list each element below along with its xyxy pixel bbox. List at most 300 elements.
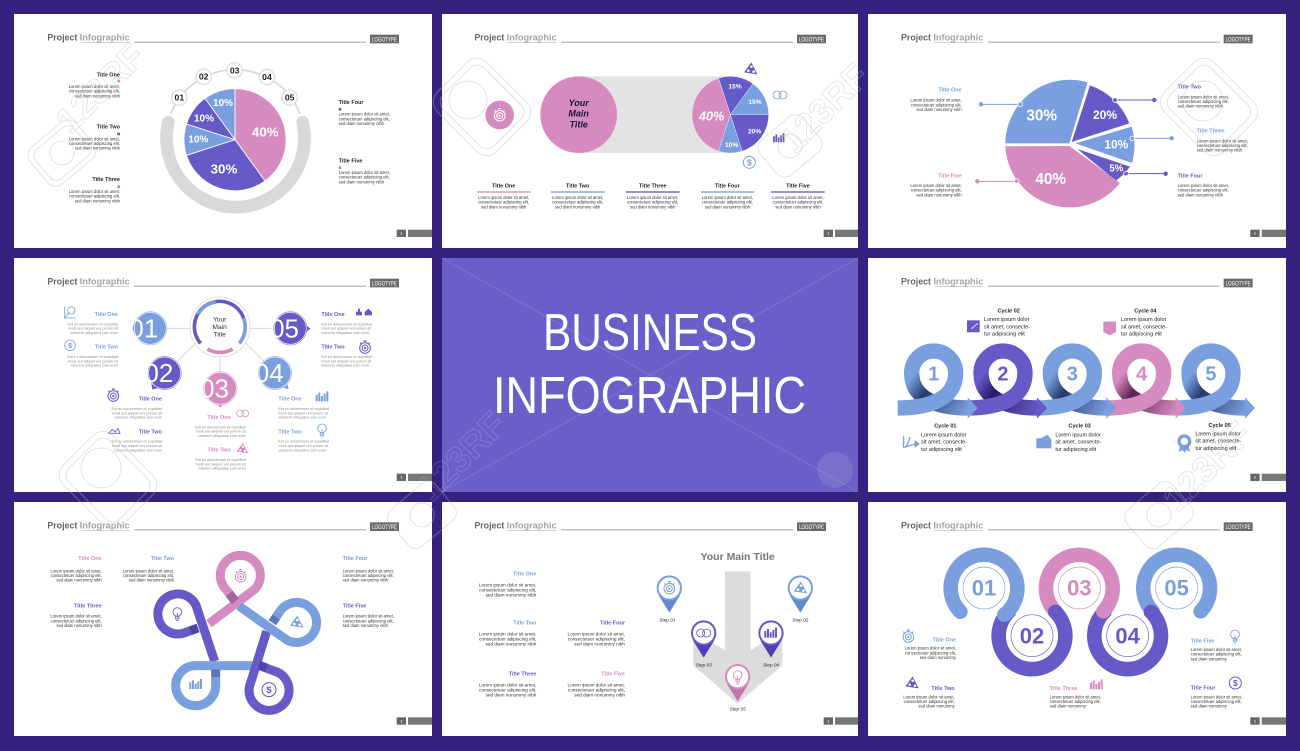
text block: 04 One: modi aut aliqnet uni porum sit [278, 411, 329, 415]
text block: 04 Two [278, 429, 330, 452]
column: Title One: consectetuer adipiscing elit, [478, 200, 529, 205]
column: Title Five: Lorem ipsum dolor sit amet, [772, 195, 824, 200]
icon: dollar purple [262, 683, 276, 697]
text: Title Five: Lorem ipsum dolor sit amet, [1191, 647, 1242, 652]
header: Infographic [933, 277, 983, 287]
text: Title Two [903, 686, 956, 709]
text: Title Three: Lorem ipsum dolor sit amet, [1050, 694, 1101, 699]
column: Title Two [551, 183, 605, 209]
pie labels: 15% [728, 84, 742, 91]
column: Title Two: Lorem ipsum dolor sit amet, [552, 195, 603, 200]
text: Title Two: sed diam nonummy nibh [75, 146, 121, 151]
text: Title Four: Lorem ipsum dolor sit amet, [339, 112, 390, 117]
knot: purple lower-right loop [249, 631, 289, 710]
main title: Your Main Title [701, 552, 775, 563]
title [493, 304, 806, 425]
number badges: 05 [285, 93, 295, 103]
header [474, 520, 858, 725]
text: Title One: Lorem ipsum dolor sit amet, [905, 646, 956, 651]
icon: dollar: $ [747, 157, 752, 167]
text: Title Two: sed diam nonummy [918, 704, 956, 709]
column: Title One: Lorem ipsum dolor sit amet, [478, 195, 529, 200]
icon: bulb blue [318, 424, 326, 437]
text block: 04 One: Est ex doloremum et cupiditat [278, 407, 330, 411]
text block: 05 Two: modi aut aliqnet uni porum sit [321, 359, 372, 363]
header: Project [474, 33, 504, 43]
icon: stopwatch pink [235, 569, 246, 582]
header: LOGOTYPE [1226, 36, 1251, 43]
ring 04: 04 [1115, 623, 1141, 648]
spiral 2 [967, 351, 1047, 419]
text block: 03 Two: Title Two [207, 448, 231, 454]
icon: magnifier [65, 306, 76, 318]
text: Title Three: Lorem ipsum dolor sit amet, [50, 614, 102, 619]
text block: 02 One: modi aut aliqnet uni porum sit [112, 411, 163, 415]
text block: 02 One: Est ex doloremum et cupiditat [112, 407, 163, 411]
text: Cycle 05: Cycle 05 [1209, 423, 1231, 429]
text: Title Three: consectetuer adipiscing elit, [51, 618, 102, 623]
text: Cycle 04: sit amet, consecte- [1121, 324, 1167, 330]
column: Title Three: Lorem ipsum dolor sit amet, [627, 195, 678, 200]
text: Title Five: Title Five [601, 672, 625, 678]
text block: 03 One: volorem vitiquatus cum eum [198, 434, 246, 438]
text: Title Four: Lorem ipsum dolor sit amet, [343, 568, 394, 573]
gray ring [166, 122, 304, 207]
text block: 03 One [195, 415, 247, 438]
node 02: 02 [144, 358, 173, 388]
text: Title Five: Title Five [938, 173, 962, 179]
text: Title One: consectetuer adipiscing elit, [905, 650, 956, 655]
text: Title Five: consectetuer adipiscing elit, [339, 175, 390, 180]
header: LOGOTYPE [1226, 524, 1251, 531]
pie labels: 40% [698, 110, 724, 124]
text block: 03 Two: Est ex doloremum et cupiditat [195, 458, 247, 462]
text: Title Four: sed diam nonummy nibh [574, 641, 625, 646]
spiral 5 [1175, 351, 1255, 419]
icon: cluster blue [290, 616, 303, 628]
header [47, 277, 432, 481]
text: Cycle 01: Lorem ipsum dolor [921, 432, 967, 438]
knot: blue right loop [239, 602, 317, 642]
pie labels: 10% [194, 113, 214, 124]
text: Title Five: consectetuer adipiscing elit, [343, 618, 394, 623]
text: Title Four: consectetuer adipiscing elit, [339, 116, 390, 121]
text: Title Two: consectetuer adipiscing elit, [479, 636, 536, 641]
text: Cycle 03: sit amet, consecte- [1055, 440, 1102, 446]
header: Infographic [507, 520, 557, 530]
text: Title Three: sed diam nonummy nibh [56, 623, 102, 628]
text block: 04 One: volorem vitiquatus cum eum [278, 416, 326, 420]
text: Title Three: sed diam nonummy nibh [486, 692, 537, 697]
text: Title One [50, 556, 102, 583]
text block: 02 Two: Title Two [139, 429, 163, 435]
text: Title One: sed diam nonummy [920, 655, 957, 660]
step labels: Step 03 [696, 663, 712, 668]
number badges: 01 [175, 93, 184, 103]
text: Title One [479, 572, 537, 597]
text block: 03 One: Title One [207, 415, 231, 421]
text: Title Four: Title Four [343, 556, 368, 562]
text: Title Two: Title Two [513, 621, 537, 627]
header: LOGOTYPE [372, 280, 397, 287]
text block: 04 Two: Est ex doloremum et cupiditat [278, 440, 330, 444]
column: Title Five: consectetuer adipiscing elit, [772, 200, 824, 205]
text block: 01 One [68, 312, 119, 335]
ring 01 [958, 562, 1010, 614]
title: INFOGRAPHIC [493, 367, 806, 425]
text: Title Three: consectetuer adipiscing elit, [1050, 699, 1101, 704]
pie labels: 10% [213, 98, 233, 109]
text: Cycle 02: tur adipiscing elit [984, 332, 1025, 338]
text: Title Two: Lorem ipsum dolor sit amet, [1178, 94, 1229, 99]
spiral 3 [1036, 351, 1116, 419]
gray arrow [693, 571, 782, 704]
header [47, 520, 432, 725]
pin 01 [657, 575, 682, 613]
text: Title One: Title One [938, 88, 962, 94]
pie labels [188, 98, 279, 176]
column: Title Two: Title Two [566, 183, 590, 189]
column: Title Two: sed diam nonummy nibh [555, 204, 601, 209]
text: Title Two: Lorem ipsum dolor sit amet, [479, 631, 536, 636]
text block: 02 Two: Est ex doloremum et cupiditat [112, 440, 163, 444]
text: Title Three: Title Three [92, 177, 120, 183]
text: Cycle 02: Lorem ipsum dolor [984, 317, 1030, 323]
pie labels: 15% [748, 99, 762, 106]
pie labels [698, 84, 762, 149]
text: Title Five [343, 604, 394, 628]
header [901, 520, 1286, 725]
header: Infographic [933, 520, 983, 530]
text: Cycle 01: sit amet, consecte- [921, 440, 967, 446]
icon: figures [356, 309, 372, 315]
text block: 02 Two [112, 429, 163, 452]
column: Title Three: Title Three [639, 183, 666, 189]
icon: dollar blue: $ [68, 341, 72, 350]
watermark overlay [24, 35, 1263, 553]
icon: bulb purple [173, 608, 182, 621]
column: Title Five: Title Five [786, 183, 810, 189]
text block: 05 Two: Title Two [321, 345, 345, 351]
icon: stopwatch badge [485, 101, 514, 129]
text: Title Three: sed diam nonummy [1050, 704, 1087, 709]
icon: dollar [743, 156, 755, 168]
text: Title One: sed diam nonummy nibh [486, 592, 537, 597]
text: Title One: Title One [97, 72, 120, 78]
text: Title Five: sed diam nonummy nibh [574, 692, 625, 697]
text: Title Three: Lorem ipsum dolor sit amet, [1197, 138, 1248, 143]
text block: 01 Two: volorem vitiquatus cum eum [70, 364, 118, 368]
text: Title Five: consectetuer adipiscing elit, [1191, 652, 1242, 657]
text: Title Three [69, 177, 121, 203]
column: Title Three [626, 183, 680, 209]
column: Title Three: sed diam nonummy nibh [630, 204, 676, 209]
header: 1 [400, 232, 402, 236]
pie labels: 10% [1104, 138, 1129, 152]
spiral 2: 2 [997, 363, 1009, 385]
pie labels: 5% [1109, 164, 1124, 175]
text: Cycle 03 [1055, 424, 1102, 453]
pie chart [184, 89, 286, 191]
text: Title Two: consectetuer adipiscing elit, [904, 699, 955, 704]
pin 04 [758, 620, 784, 658]
panel: center title [442, 258, 858, 492]
text block: 04 One [278, 397, 330, 420]
main title circle: Main [568, 109, 589, 119]
icon: chart blue [316, 391, 328, 401]
text block: 05 One: Est ex doloremum et cupiditat [321, 322, 373, 326]
ring 02: 02 [1020, 623, 1044, 648]
text block: 03 Two: volorem vitiquatus cum eum [198, 467, 246, 471]
connector: Title Five [975, 179, 1019, 183]
header: 1 [400, 719, 402, 723]
node 03: 03 [200, 373, 229, 403]
pie labels: 40% [252, 125, 279, 140]
text: Title One: Title One [933, 637, 956, 643]
text: Cycle 04: tur adipiscing elit [1121, 332, 1162, 338]
text: Title Two: Title Two [1178, 84, 1202, 90]
text block: 05 One [321, 312, 373, 335]
text block: 05 Two [321, 345, 373, 368]
icon: brain pink [237, 410, 249, 417]
header [901, 33, 1286, 237]
text: Title Four [339, 100, 390, 126]
knot: purple upper-left loop [158, 594, 215, 661]
number badges: 02 [199, 72, 209, 82]
icon: chart blue [189, 679, 202, 689]
watermark overlay: 123RF [1154, 413, 1260, 519]
ring 03 [1053, 562, 1105, 614]
title: BUSINESS [543, 304, 757, 362]
header [901, 277, 1286, 481]
text: Title Two: sed diam nonummy nibh [486, 641, 537, 646]
text: Title Two [1178, 84, 1229, 109]
column: Title Five [771, 183, 825, 209]
text: Title One [905, 637, 957, 660]
header: Infographic [80, 277, 130, 287]
icon: shield [1103, 322, 1116, 335]
pie chart [692, 76, 769, 153]
panel: down arrow with pins [442, 502, 858, 736]
text block: 03 Two: modi aut aliqnet uni porum sit [196, 462, 247, 466]
text block: 04 Two: volorem vitiquatus cum eum [278, 448, 326, 452]
header: 1 [1254, 719, 1256, 723]
connectors [166, 328, 274, 373]
node 01 [129, 312, 167, 345]
text block: 05 Two: volorem vitiquatus cum eum [321, 364, 369, 368]
node 05 [270, 312, 310, 345]
number badges: 04 [262, 72, 272, 82]
step labels: Step 01 [659, 617, 676, 622]
text block: 02 Two: volorem vitiquatus cum eum [114, 448, 162, 452]
header: Project [474, 520, 504, 530]
icon: stopwatch purple lower [108, 388, 119, 401]
text block: 04 One: Title One [278, 397, 302, 403]
pin 05 [725, 664, 750, 701]
icon: cluster [744, 62, 757, 74]
text: Title Five: sed diam nonummy nibh [343, 623, 389, 628]
connector: Title Two [1113, 98, 1156, 102]
hub title [212, 317, 227, 338]
text: Cycle 04: Cycle 04 [1134, 308, 1157, 314]
header [474, 33, 858, 237]
step labels: Step 04 [763, 663, 779, 668]
main title circle: Your [569, 98, 589, 108]
text: Title Five: Lorem ipsum dolor sit amet, [910, 183, 962, 188]
icon: brain [773, 91, 787, 99]
header: Project [901, 277, 931, 287]
icon: dollar blue [65, 340, 75, 351]
text block: 02 One: volorem vitiquatus cum eum [114, 416, 162, 420]
ring 01: 01 [972, 576, 996, 601]
text: Title Three [1197, 128, 1248, 153]
header: LOGOTYPE [372, 36, 397, 43]
text block: 05 One: volorem vitiquatus cum eum [321, 331, 369, 335]
node 03 [200, 372, 237, 408]
text block: 02 One [112, 397, 163, 420]
text: Title Three: sed diam nonummy nibh [1197, 148, 1243, 153]
text block: 05 One: Title One [321, 312, 345, 318]
icon: stopwatch purple [360, 340, 370, 353]
text: Title Four: Title Four [600, 621, 626, 627]
connector: Title One [979, 102, 1023, 107]
text: Cycle 04 [1121, 308, 1167, 338]
text: Title Four: Lorem ipsum dolor sit amet, [1178, 183, 1229, 188]
main title circle [540, 76, 617, 153]
text: Cycle 02: Cycle 02 [998, 308, 1020, 314]
panel: radial hub diagram [14, 258, 432, 492]
icon: arrows [903, 436, 919, 447]
icon: cluster [905, 676, 919, 688]
header: Project [901, 33, 931, 43]
step labels [659, 617, 809, 711]
text: Title Four: Title Four [1191, 686, 1216, 692]
text: Title Two: Title Two [151, 556, 175, 562]
text: Cycle 03: Cycle 03 [1069, 424, 1091, 430]
pie labels: 10% [188, 134, 208, 145]
text block: 04 Two: modi aut aliqnet uni porum sit [278, 444, 329, 448]
hub title: Main [212, 324, 227, 331]
icon: bulb [1231, 630, 1239, 643]
text: Title One: sed diam nonummy nibh [56, 578, 102, 583]
text: Title Four: Lorem ipsum dolor sit amet, [568, 631, 625, 636]
column: Title Four: consectetuer adipiscing elit, [702, 200, 753, 205]
text: Title One: Title One [513, 572, 536, 578]
text: Cycle 03: tur adipiscing elit [1055, 447, 1097, 453]
header: Project [47, 277, 77, 287]
arcs [951, 555, 1210, 669]
text block: 02 One: Title One [139, 397, 162, 403]
text: Cycle 02 [984, 308, 1030, 338]
text block: 05 One: modi aut aliqnet uni porum sit [321, 327, 372, 331]
panel: main title to pie [442, 14, 858, 248]
text: Title Three [50, 604, 102, 628]
ring 04 [1102, 610, 1154, 662]
header: 1 [1254, 476, 1256, 480]
icon: wallet [1036, 435, 1051, 448]
pie labels: 20% [1093, 108, 1117, 122]
text block: 03 Two [195, 448, 247, 471]
spiral 4 [1106, 351, 1186, 419]
text: Title One: consectetuer adipiscing elit, [69, 89, 120, 94]
text: Title Five: sed diam nonummy [1191, 656, 1228, 661]
step labels: Step 02 [792, 617, 809, 622]
text block: 01 Two: Est ex doloremum et cupiditat [68, 355, 119, 359]
column: Title Three: consectetuer adipiscing elit, [627, 200, 678, 205]
text: Title Four: Title Four [1178, 173, 1203, 179]
header: Infographic [933, 33, 983, 43]
icon: cluster pink [237, 443, 248, 453]
text: Title Three: Title Three [509, 672, 536, 678]
header: Project [901, 520, 931, 530]
pin 02 [788, 575, 813, 613]
text: Title Three: consectetuer adipiscing elit, [69, 194, 120, 199]
text: Title Five: Title Five [339, 158, 362, 164]
text: Title One [910, 88, 962, 112]
text: Title Five: Lorem ipsum dolor sit amet, [339, 170, 390, 175]
icon: dollar [1229, 677, 1241, 689]
column: Title Five: sed diam nonummy nibh [775, 204, 821, 209]
text: Title Three [479, 672, 537, 697]
text: Title Four [568, 621, 626, 646]
header: Infographic [80, 520, 130, 530]
pie labels: 30% [1026, 108, 1057, 125]
text: Cycle 05: tur adipiscing elit [1195, 446, 1237, 452]
watermark overlay: 123RF [771, 55, 877, 161]
ring 05: 05 [1164, 576, 1189, 601]
icon: pencil square [967, 320, 980, 332]
pie labels: 10% [725, 142, 738, 149]
column: Title One [477, 183, 531, 209]
text: Title Five: Lorem ipsum dolor sit amet, [343, 614, 394, 619]
pie labels: 40% [1035, 171, 1066, 188]
text: Title Four: sed diam nonummy nibh [1178, 192, 1224, 197]
header [47, 33, 432, 237]
text: Title Four: sed diam nonummy nibh [339, 121, 385, 126]
text: Title Five: sed diam nonummy nibh [339, 179, 385, 184]
text: Title Three: sed diam nonummy nibh [75, 198, 121, 203]
text: Cycle 01: Cycle 01 [934, 424, 956, 430]
text: Title Two: Lorem ipsum dolor sit amet, [69, 136, 120, 141]
pie labels: 30% [211, 161, 237, 176]
panel: pie chart with numbered arc [14, 14, 432, 248]
text: Title Three: consectetuer adipiscing elit, [479, 687, 536, 692]
text: Title Four [1178, 173, 1229, 197]
panel: serpentine numbered rings [868, 502, 1286, 736]
header: LOGOTYPE [372, 524, 397, 531]
header: 1 [1254, 232, 1256, 236]
text: Title One: sed diam nonummy nibh [75, 93, 121, 98]
text: Title Four [1191, 686, 1242, 709]
text: Title One: Lorem ipsum dolor sit amet, [69, 84, 120, 89]
text: Title Three: Title Three [1050, 686, 1077, 692]
connector: Title Four [1124, 171, 1168, 176]
text: Title Three [1050, 686, 1101, 709]
panel: spiral cycles [868, 258, 1286, 492]
text: Title Three: Lorem ipsum dolor sit amet, [69, 189, 120, 194]
hub title: Your [213, 317, 227, 324]
spiral 1: 1 [928, 363, 939, 385]
text: Title Three: consectetuer adipiscing elit, [1197, 143, 1248, 148]
icon: stopwatch [903, 629, 914, 642]
text: Title Five: Title Five [343, 604, 366, 610]
text: Title Five: Lorem ipsum dolor sit amet, [568, 682, 625, 687]
text: Title Five [1191, 638, 1242, 661]
connector: Title Three [1130, 136, 1174, 141]
header: LOGOTYPE [799, 36, 824, 43]
knot: pink top loop [209, 555, 260, 624]
text: Title One: Lorem ipsum dolor sit amet, [50, 568, 102, 573]
